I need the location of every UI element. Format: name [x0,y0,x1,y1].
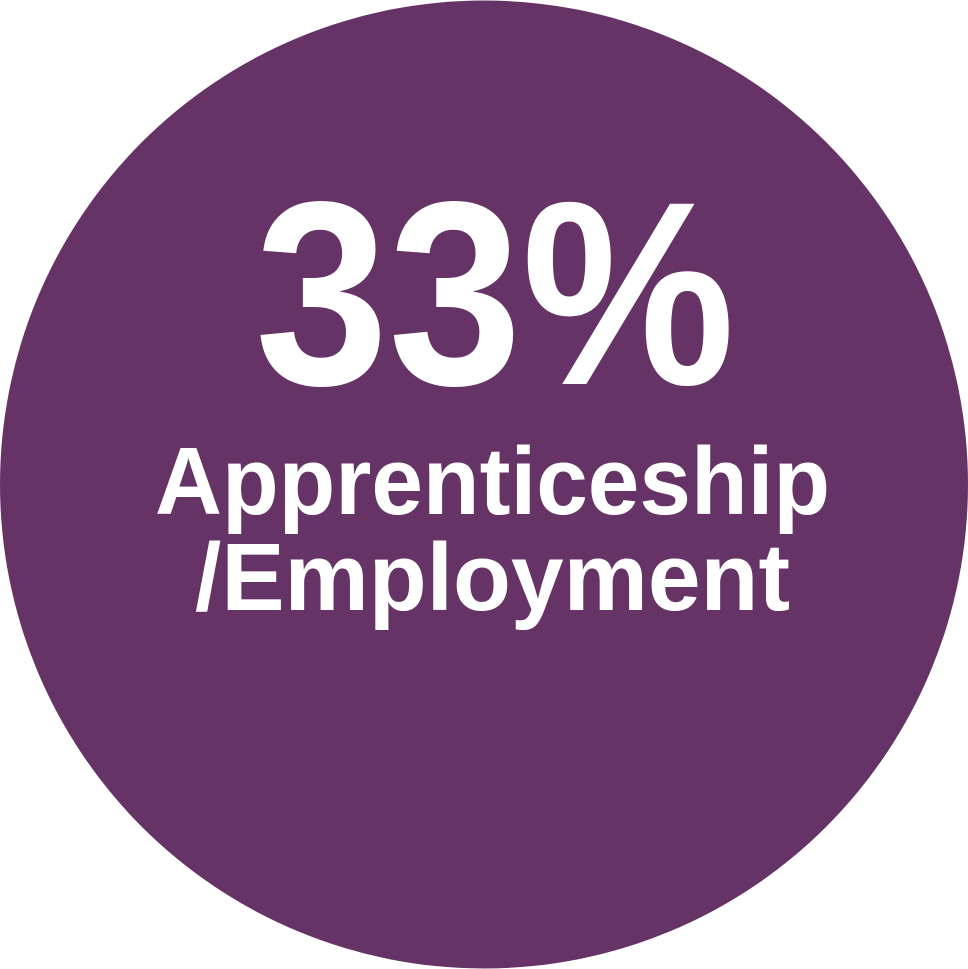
label text: Apprenticeship [155,428,830,535]
label text: /Employment [195,524,790,631]
label text [155,428,830,631]
stat: 33%: 33% [255,147,735,440]
